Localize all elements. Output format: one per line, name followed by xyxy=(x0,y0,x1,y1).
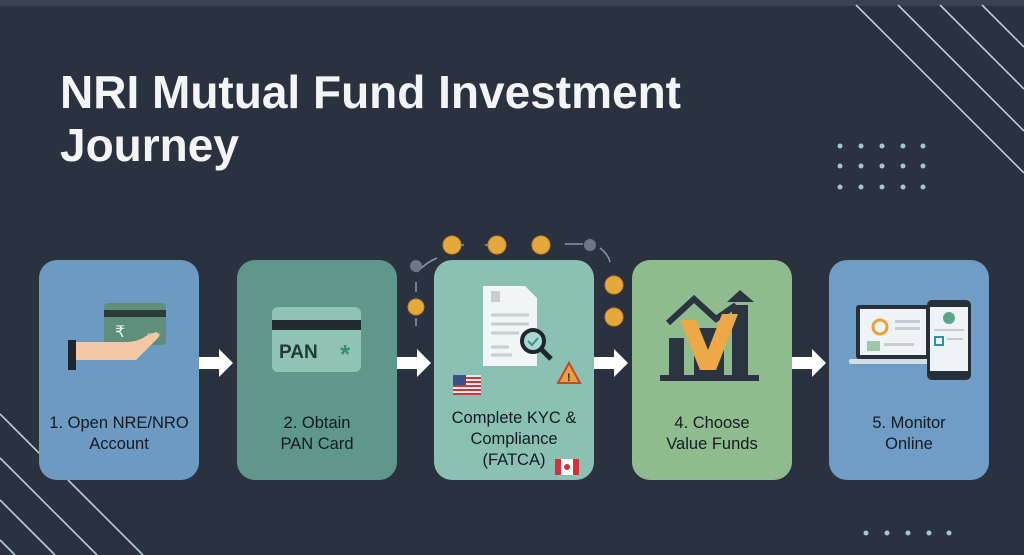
icon: chart with V xyxy=(660,290,759,381)
panel: step 3 KYC xyxy=(434,260,594,480)
title: NRI Mutual Fund Investment xyxy=(60,66,681,118)
arrow 2 xyxy=(397,349,431,377)
panel: step 4 value funds: 4. Choose xyxy=(674,414,750,432)
panel: step 4 value funds: Value Funds xyxy=(666,435,758,453)
panel: step 3 KYC: Complete KYC & xyxy=(452,409,576,427)
panel: step 5 monitor online xyxy=(829,260,989,480)
icon: hand with card xyxy=(68,303,166,370)
panel: step 3 KYC: (FATCA) xyxy=(483,451,545,469)
panel: step 1 open account xyxy=(39,260,199,480)
coins path xyxy=(408,236,624,326)
icon: PAN card xyxy=(272,307,361,372)
icon: document with magnifier and flags: ! xyxy=(567,372,571,384)
panel: step 5 monitor online: Online xyxy=(885,435,933,453)
panel: step 5 monitor online: 5. Monitor xyxy=(872,414,946,432)
title: Journey xyxy=(60,119,239,171)
icon: PAN card: PAN xyxy=(279,342,318,363)
arrow 4 xyxy=(792,349,826,377)
panel: step 2 PAN: PAN Card xyxy=(280,435,354,453)
panel: step 2 PAN xyxy=(237,260,397,480)
title xyxy=(60,66,681,171)
arrow 3 xyxy=(594,349,628,377)
icon: document with magnifier and flags xyxy=(453,286,582,475)
icon: hand with card: ₹ xyxy=(115,322,125,341)
icon: laptop and phone xyxy=(849,300,971,380)
panel: step 2 PAN: 2. Obtain xyxy=(284,414,350,432)
panel: step 1 open account: 1. Open NRE/NRO xyxy=(49,414,189,432)
icon: PAN card: * xyxy=(340,339,351,369)
panel: step 3 KYC: Compliance xyxy=(470,430,558,448)
arrow 1 xyxy=(199,349,233,377)
panel: step 4 value funds xyxy=(632,260,792,480)
panel: step 1 open account: Account xyxy=(89,435,149,453)
